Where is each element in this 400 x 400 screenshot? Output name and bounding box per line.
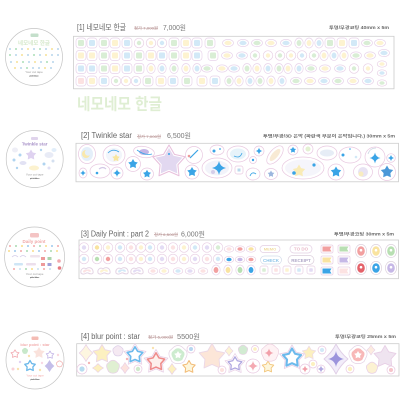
circle sticker sample 1: Your cut tape [25, 70, 43, 74]
circle sticker sample 3: pinkribbon [30, 277, 39, 279]
row 4 stickers [76, 76, 387, 86]
word pills: RECEIPT [291, 258, 311, 263]
sticker: shooting star [103, 145, 125, 165]
pastel hangul logo: 네모네모 한글 [77, 96, 162, 114]
round icons row 1 [79, 243, 223, 252]
circle sticker sample 4: pinkribbon [30, 379, 40, 381]
heart stickers [224, 246, 256, 263]
sale price 2: 6,500원 [167, 131, 191, 140]
middle star stickers [199, 344, 326, 374]
original price 4: 정가 6,000원 [148, 334, 173, 340]
circle sticker sample 4 [6, 331, 64, 389]
title: product 2: [2] Twinkle star [81, 131, 132, 140]
circle sticker sample 4: Your cut tape [26, 374, 44, 378]
spec 3: 투명/무광코팅 30mm x 5m [334, 230, 394, 238]
flag stickers [321, 245, 350, 275]
title: product 3: [3] Daily Point : part 2 [81, 230, 149, 238]
circle sticker sample 2: pinkribbon [30, 178, 39, 180]
tape strip 3 [79, 240, 398, 279]
circle sticker sample 2: Your cut tape [26, 172, 44, 176]
spec 4: 투명/무광코팅 25mm x 5m [335, 333, 396, 340]
word pills [260, 245, 314, 264]
circle sticker sample 1: 네모네모 한글 [18, 39, 50, 47]
circle sticker sample 1: pinkribbon [29, 76, 39, 78]
upper right stickers [210, 143, 395, 167]
title: product 1: [1] 네모네모 한글 [77, 23, 126, 32]
circle sticker sample 2: Twinkle star [22, 142, 48, 146]
sale price 4: 5500원 [177, 332, 200, 341]
sale price 1: 7,000원 [163, 23, 186, 32]
row 2 stickers [76, 49, 390, 60]
circle sticker sample 3 [5, 227, 65, 287]
spec 1: 투명/무광코팅 40mm x 5m [329, 24, 389, 31]
blue stars and sparkles row [79, 156, 199, 180]
circle sticker sample 3: Your cut tape [26, 272, 44, 276]
map pin stickers [355, 244, 397, 275]
row 3 stickers [76, 61, 387, 76]
round icons row 2 [79, 254, 223, 264]
circle sticker sample 4: blur point : star [20, 342, 50, 347]
original price 2: 정가 7,000원 [137, 133, 161, 139]
circle sticker sample 2 [6, 130, 63, 188]
sticker: moon [78, 144, 96, 164]
original price 1: 정가 7,000원 [134, 24, 158, 30]
sticker: planet [133, 145, 155, 159]
lower right stickers [202, 157, 396, 180]
circle sticker sample 3: Daily point [22, 239, 46, 244]
tape strip 1 [74, 36, 394, 89]
word pills: MEMO [264, 246, 276, 252]
word pills: TO DO [294, 246, 309, 252]
tape strip 4 [77, 344, 399, 376]
spec 2: 투명/무광/3D 은박 (파란색 부분이 은박입니다.) 30mm x 5m [263, 132, 395, 140]
row 1 stickers [76, 38, 386, 48]
original price 3: 정가 6,500원 [154, 231, 178, 237]
word pills: CHECK [263, 258, 280, 263]
squiggles and hearts row 3 [81, 265, 315, 275]
right star stickers [324, 344, 396, 374]
tape strip 2 [76, 143, 398, 182]
sale price 3: 6,000원 [181, 230, 205, 238]
left star stickers [77, 344, 195, 374]
title: product 4: [4] blur point : star [81, 332, 140, 341]
sticker: comet [186, 146, 202, 164]
sticker: lavender star [153, 145, 185, 176]
circle sticker sample 1 [6, 28, 62, 86]
